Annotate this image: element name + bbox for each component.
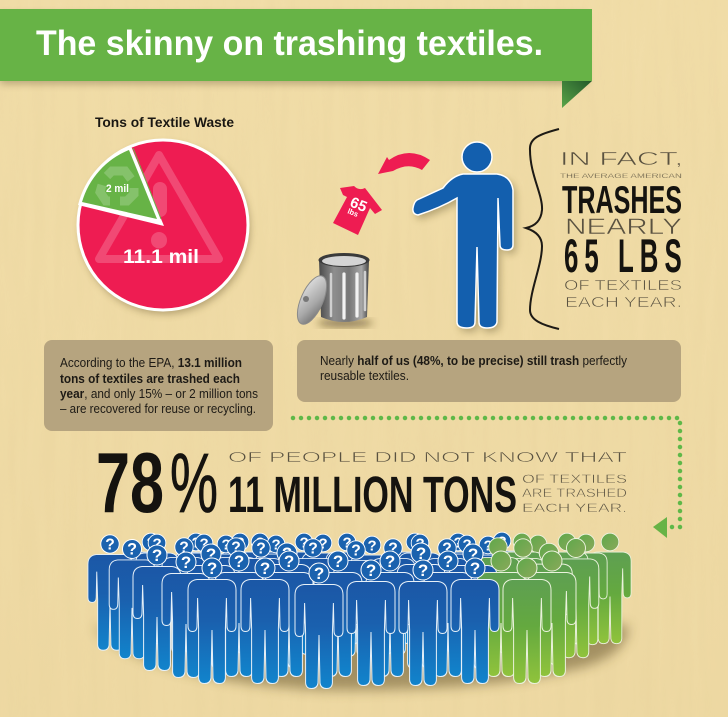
crowd of people: ? [333,552,343,571]
crowd of people: ? [308,541,318,558]
crowd of people: ? [366,561,376,580]
text block: in fact: EACH YEAR. [565,294,682,311]
recycle icon [100,171,134,201]
crowd of people: ? [146,534,156,551]
crowd of people: ? [282,544,292,563]
curly brace [526,129,559,329]
crowd of people: ? [284,552,294,571]
pie chart: tons of textile waste [78,140,250,314]
panel: EPA statistic: year, and only 15% – or 2 million tons [60,387,258,401]
panel: half of us statistic [297,340,681,402]
warning triangle watermark [99,155,219,259]
crowd of people: ? [231,540,241,557]
crowd of people: ? [388,541,398,558]
crowd of people: ? [255,534,265,551]
crowd of people: ? [152,535,162,552]
text block: in fact: OF TEXTILES [564,277,682,294]
pie chart: tons of textile waste: 11.1 mil [123,247,199,268]
panel: half of us statistic: Nearly half of us (48%, to be precise) still trash perfectly [320,354,628,368]
crowd of people: ? [260,559,270,578]
panel: EPA statistic [44,340,273,431]
crowd of people: ? [314,564,324,583]
crowd of people: ? [468,545,478,564]
crowd of people: ? [367,537,377,554]
crowd of people: ? [206,545,216,564]
crowd of people: ? [462,536,472,553]
crowd of people: ? [152,546,162,565]
crowd of people: ? [105,537,115,554]
crowd of people: ? [415,535,425,552]
headline statistic: 78%: OF PEOPLE DID NOT KNOW THAT [228,449,627,466]
icon: standing person [413,142,516,332]
arrow: toss motion [378,153,430,174]
icon: trash can [291,253,373,328]
panel: half of us statistic: reusable textiles. [320,369,409,383]
headline statistic: 78%: % [170,436,218,530]
crowd of people: ? [483,537,493,554]
crowd of people: ? [221,536,231,553]
crowd of people: ? [199,535,209,552]
headline statistic: 78%: 11 MILLION TONS [228,466,517,523]
crowd of people: ? [418,561,428,580]
crowd of people: ? [271,536,281,553]
panel: EPA statistic: – are recovered for reuse or recycling. [60,402,256,416]
crowd of people: ? [342,534,352,551]
crowd of people: ? [256,541,266,558]
crowd of people: ? [497,533,507,550]
crowd of people: ? [191,534,201,551]
crowd of people [88,532,631,688]
arrow: dotted green connector [293,418,680,538]
crowd of people: ? [179,540,189,557]
crowd of people: ? [453,534,463,551]
crowd of people: ? [234,552,244,571]
pie chart: tons of textile waste: 2 mil [106,183,129,195]
crowd of people: ? [410,534,420,551]
crowd of people: ? [385,552,395,571]
crowd of people: ? [299,534,309,551]
headline statistic: 78%: 78 [96,436,164,531]
title banner: The skinny on trashing textiles. [36,24,543,63]
icon: red t-shirt 65 lbs: 65 [348,194,369,216]
text block: in fact: NEARLY [565,214,682,239]
crowd of people: ? [470,559,480,578]
crowd of people: ? [127,541,137,559]
crowd of people: ? [235,534,245,551]
headline statistic: 78%: OF TEXTILES [522,472,627,486]
crowd of people: ? [442,541,452,558]
text block: in fact: 65 LBS [564,231,682,283]
headline statistic: 78% [96,436,627,531]
panel: EPA statistic: According to the EPA, 13.1 million [60,356,242,370]
text block: in fact [560,149,683,311]
panel: EPA statistic: tons of textiles are trashed each [60,372,240,386]
text block: in fact: IN FACT, [560,149,683,169]
headline statistic: 78%: EACH YEAR. [522,501,627,515]
crowd of people: ? [416,544,426,563]
crowd of people: ? [207,559,217,578]
title banner [0,9,592,108]
pie chart heading: Tons of Textile Waste [95,115,235,130]
icon: red t-shirt 65 lbs [333,186,382,235]
icon: red t-shirt 65 lbs: lbs [346,207,360,219]
headline statistic: 78%: ARE TRASHED [522,486,627,500]
crowd of people: ? [351,543,361,560]
recovered slice [78,146,164,226]
crowd of people: ? [443,552,453,571]
crowd of people: ? [318,535,328,552]
crowd shadow [94,625,628,690]
crowd of people: ? [181,553,191,572]
text block: in fact: THE AVERAGE AMERICAN [560,173,682,180]
